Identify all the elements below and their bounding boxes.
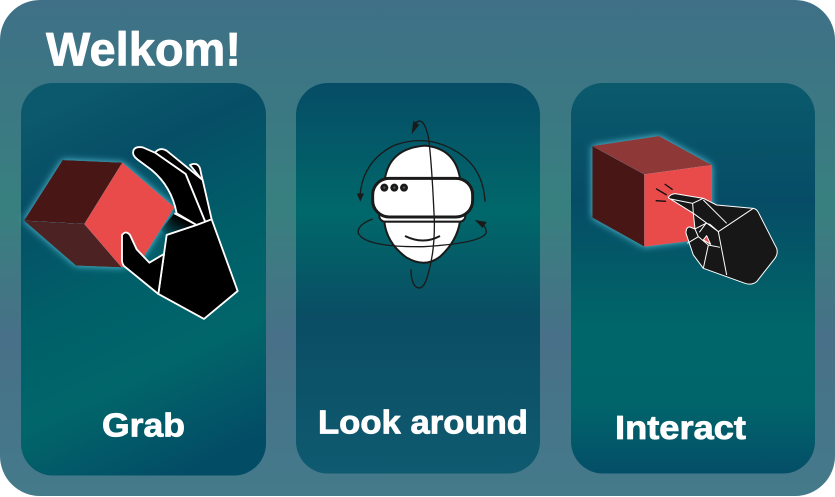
label: interact: Interact [615,409,746,446]
icon: touched cube [592,136,712,247]
icon: head with VR headset [357,121,487,288]
title: Welkom! [46,22,241,76]
rotation arrows [358,121,486,288]
label: look around: Look around [318,404,528,440]
label: grab: Grab [102,407,185,444]
icon: pointing hand [668,194,777,284]
icon: grabbed cube [24,160,174,267]
panel: grab [21,83,266,476]
icon: grabbing hand [122,147,238,319]
panel: look around [296,83,540,474]
panel: interact [571,83,815,474]
icon: touch lines [656,184,673,201]
